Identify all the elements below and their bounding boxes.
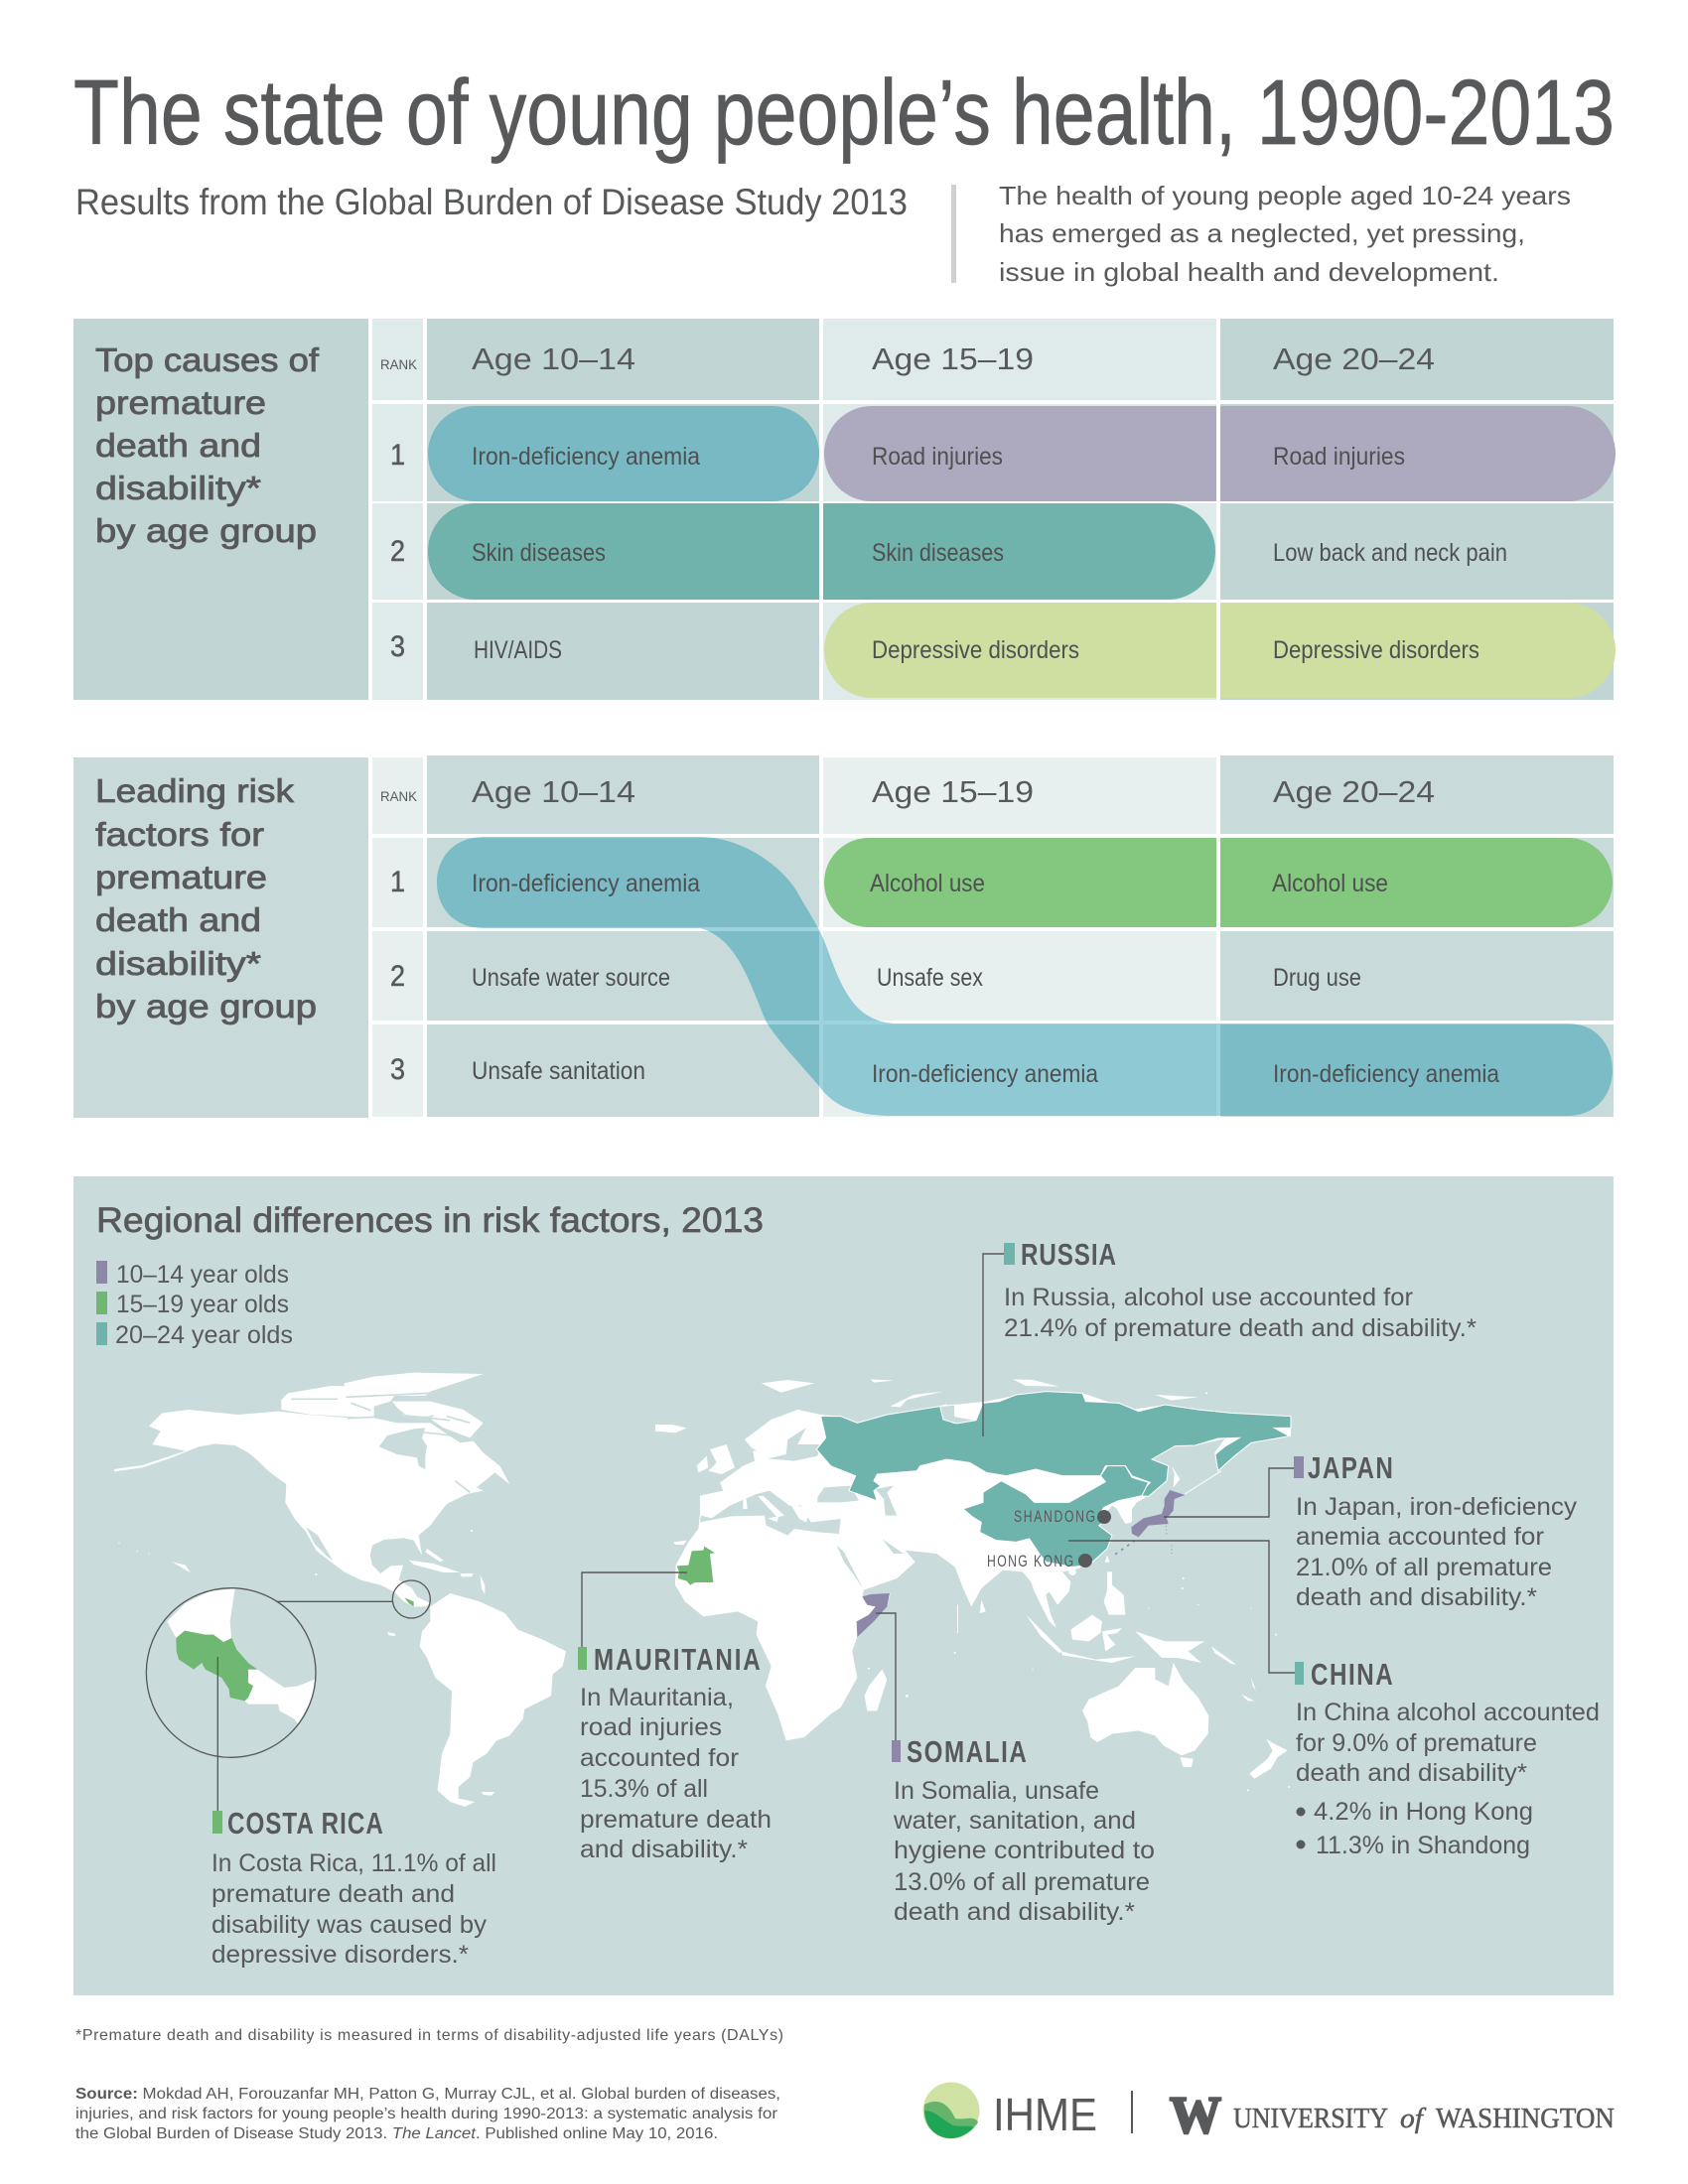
age headers: [472, 774, 1435, 809]
intro text block: The health of young people aged 10-24 years: [999, 181, 1571, 210]
map label: Shandong: SHANDONG: [1014, 1508, 1095, 1527]
callout: Japan: [1164, 1450, 1578, 1611]
callout: Costa Rica: disability was caused by: [211, 1911, 488, 1939]
cell labels: Iron-deficiency anemia: [472, 443, 700, 471]
cell labels: Alcohol use: [1272, 870, 1388, 897]
logo: University of Washington: UNIVERSITY: [1233, 2104, 1388, 2134]
cell labels: Unsafe sex: [877, 964, 983, 992]
source citation: injuries, and risk factors for young people’s health during 1990-2013: a systematic analysis for: [75, 2106, 777, 2122]
logo: University of Washington: of: [1400, 2104, 1426, 2134]
heading: leading risk factors: death and: [95, 901, 261, 938]
pill: road injuries: [824, 406, 1616, 501]
callout: Somalia: [876, 1613, 1155, 1926]
age headers: [472, 341, 1435, 376]
callout: Japan: In Japan, iron-deficiency: [1296, 1493, 1578, 1521]
callout: Somalia: In Somalia, unsafe: [894, 1777, 1099, 1805]
cell labels: Road injuries: [872, 443, 1003, 471]
pill: alcohol use: [824, 838, 1613, 927]
subtitle: Results from the Global Burden of Disease Study 2013: [75, 182, 908, 222]
logo: IHME: IHME: [993, 2089, 1097, 2140]
age headers: Age 10–14: [472, 341, 635, 376]
cell labels: [472, 443, 1507, 664]
callout: Russia: 21.4% of premature death and disability.*: [1004, 1314, 1477, 1342]
cell labels: HIV/AIDS: [474, 636, 562, 664]
rank column: [372, 319, 423, 700]
heading: leading risk factors: [73, 757, 368, 1118]
callout: Russia: [983, 1237, 1477, 1436]
heading: top causes: Top causes of: [95, 341, 320, 378]
callout: Costa Rica: COSTA RICA: [227, 1806, 383, 1841]
rank column: [372, 757, 423, 1117]
age headers: Age 15–19: [872, 774, 1034, 809]
heading: leading risk factors: by age group: [95, 988, 317, 1024]
callout: Costa Rica: [211, 1806, 496, 1969]
callout: Japan: death and disability.*: [1296, 1583, 1537, 1611]
cell labels: Depressive disorders: [1273, 636, 1479, 664]
cell labels: Road injuries: [1273, 443, 1405, 471]
callout: Mauritania: In Mauritania,: [580, 1684, 734, 1711]
heading: leading risk factors: disability*: [95, 945, 261, 982]
China: [963, 1466, 1149, 1567]
legend: 20–24 year olds: [115, 1321, 293, 1349]
rank column: 2: [390, 535, 405, 568]
rank column: RANK: [380, 356, 418, 372]
Russia: [816, 1392, 1291, 1501]
panel: regional differences map: [73, 1176, 1614, 1995]
Japan: [1114, 1490, 1185, 1556]
source citation: [75, 2086, 780, 2142]
logo: University of Washington: [1170, 2087, 1615, 2144]
heading: top causes: disability*: [95, 470, 261, 506]
intro text block: has emerged as a neglected, yet pressing,: [999, 218, 1525, 248]
rank column: 3: [390, 630, 405, 663]
callout: China: 4.2% in Hong Kong: [1314, 1798, 1533, 1826]
heading: top causes: by age group: [95, 512, 317, 549]
rank column: 2: [390, 960, 405, 993]
rank column: RANK: [380, 788, 418, 804]
map heading: Regional differences in risk factors, 2013: [96, 1201, 764, 1240]
callout: China: [1068, 1541, 1600, 1859]
callout: Costa Rica: premature death and: [211, 1880, 455, 1908]
cell labels: Unsafe sanitation: [472, 1057, 645, 1085]
callout: Mauritania: 15.3% of all: [580, 1775, 708, 1803]
callout: Russia: RUSSIA: [1021, 1237, 1116, 1272]
inset: Costa Rica magnifier: [146, 1580, 430, 1812]
cell labels: Iron-deficiency anemia: [1273, 1060, 1499, 1088]
map label: Hong Kong: HONG KONG: [987, 1553, 1073, 1571]
logo: University of Washington: WASHINGTON: [1436, 2104, 1615, 2134]
callout: Russia: In Russia, alcohol use accounted for: [1004, 1284, 1413, 1311]
legend: 15–19 year olds: [116, 1291, 289, 1318]
callout: Mauritania: road injuries: [580, 1713, 722, 1741]
intro text block: issue in global health and development.: [999, 257, 1499, 287]
cell labels: Skin diseases: [872, 539, 1004, 567]
heading: leading risk factors: premature: [95, 859, 267, 895]
callout: Mauritania: [578, 1572, 772, 1863]
heading: top causes: death and: [95, 427, 261, 464]
callout: Mauritania: MAURITANIA: [594, 1642, 761, 1677]
Mauritania: [677, 1547, 715, 1585]
callout: Mauritania: premature death: [580, 1806, 772, 1834]
callout: Somalia: SOMALIA: [907, 1734, 1027, 1769]
callout: Costa Rica: depressive disorders.*: [211, 1941, 469, 1969]
panel: risk factors table: [73, 755, 1614, 1118]
rank column: 3: [390, 1053, 405, 1086]
age headers: Age 10–14: [472, 774, 635, 809]
footnote: *Premature death and disability is measured in terms of disability-adjusted life years (DALYs): [75, 2027, 783, 2044]
legend: 10–14 year olds: [116, 1261, 289, 1289]
callout: Japan: 21.0% of all premature: [1296, 1554, 1552, 1581]
pill: depressive disorders: [824, 603, 1616, 698]
pill: skin diseases: [428, 503, 1215, 600]
logo: IHME: [923, 2083, 1097, 2140]
cell labels: [472, 870, 1499, 1088]
callout: China: In China alcohol accounted: [1296, 1699, 1600, 1726]
cell labels: Skin diseases: [472, 539, 606, 567]
world map: Europe, Africa, Asia: [655, 1379, 1291, 1740]
intro text block: [951, 181, 1571, 287]
callout: Japan: JAPAN: [1308, 1450, 1393, 1485]
rank column: 1: [390, 866, 405, 898]
ribbon: iron-deficiency anemia rank change: [437, 837, 1613, 1116]
callout: China: death and disability*: [1296, 1759, 1527, 1787]
cell labels: Iron-deficiency anemia: [472, 870, 700, 897]
heading: leading risk factors: factors for: [95, 816, 264, 853]
cell labels: Low back and neck pain: [1273, 539, 1507, 567]
cell labels: Iron-deficiency anemia: [872, 1060, 1098, 1088]
table grid cells: [427, 319, 1614, 700]
age headers: Age 20–24: [1273, 341, 1435, 376]
pill: iron-deficiency anemia: [428, 406, 819, 501]
callout: China: for 9.0% of premature: [1296, 1729, 1537, 1757]
table grid cells: [427, 755, 1614, 1117]
logo: University of Washington: W: [1170, 2087, 1221, 2144]
callout: Mauritania: accounted for: [580, 1744, 739, 1772]
cell labels: Depressive disorders: [872, 636, 1079, 664]
callout: Somalia: water, sanitation, and: [893, 1807, 1136, 1835]
callout: Somalia: death and disability.*: [894, 1898, 1135, 1926]
world map: Americas: [114, 1373, 566, 1807]
cell labels: Unsafe water source: [472, 964, 670, 992]
callout: Japan: anemia accounted for: [1296, 1523, 1544, 1551]
callout: Somalia: 13.0% of all premature: [894, 1868, 1150, 1896]
age headers: Age 20–24: [1273, 774, 1435, 809]
callout: Mauritania: and disability.*: [580, 1836, 748, 1863]
cell labels: Drug use: [1273, 964, 1361, 992]
heading: top causes: [73, 319, 368, 700]
Somalia: [857, 1593, 890, 1637]
legend: [96, 1261, 293, 1349]
heading: leading risk factors: Leading risk: [95, 772, 295, 809]
age headers: Age 15–19: [872, 341, 1034, 376]
cell labels: Alcohol use: [870, 870, 985, 897]
panel: top causes table: [73, 319, 1616, 700]
heading: top causes: premature: [95, 384, 266, 421]
rank column: 1: [390, 439, 405, 472]
callout: China: CHINA: [1311, 1657, 1393, 1692]
source citation: Source: Mokdad AH, Forouzanfar MH, Patton G, Murray CJL, et al. Global burden of diseases,: [75, 2086, 780, 2103]
callout: China: 11.3% in Shandong: [1316, 1832, 1530, 1859]
world map: Oceania and east Asia: [1013, 1379, 1290, 1791]
callout: Costa Rica: In Costa Rica, 11.1% of all: [211, 1849, 496, 1877]
callout: Somalia: hygiene contributed to: [894, 1837, 1155, 1864]
source citation: the Global Burden of Disease Study 2013. The Lancet . Published online May 10, 2016.: [75, 2125, 718, 2142]
